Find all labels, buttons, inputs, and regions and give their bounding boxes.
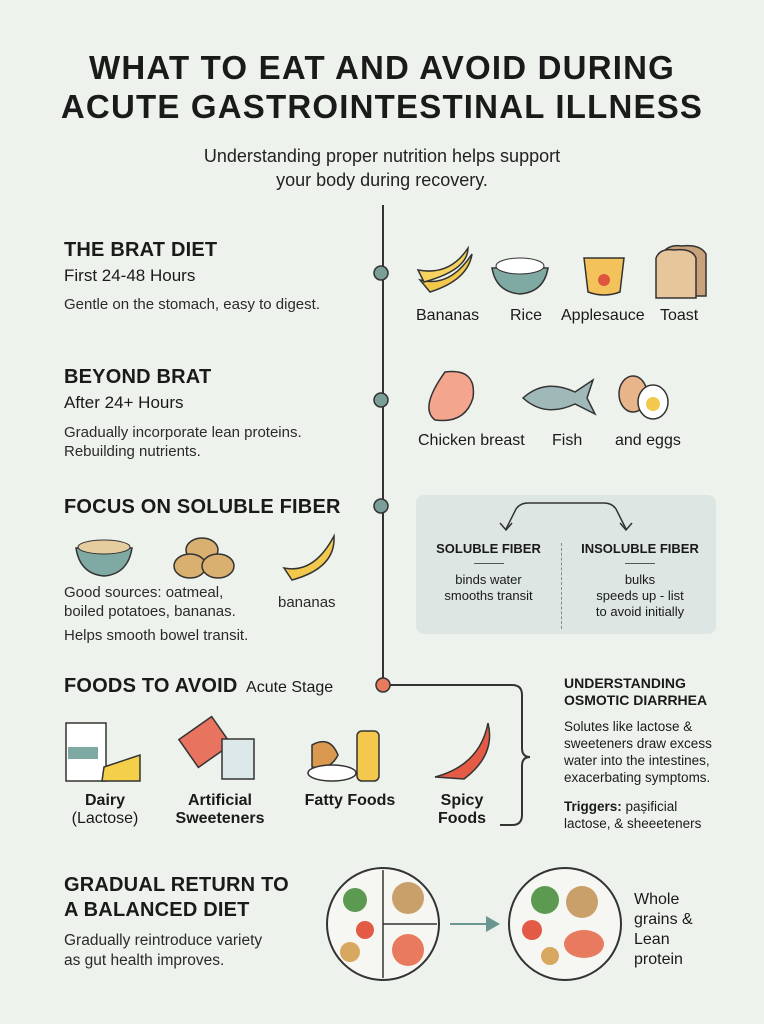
section: BRAT diet: First 24-48 Hours bbox=[64, 266, 195, 285]
callout: osmotic diarrhea: Solutes like lactose & bbox=[564, 719, 692, 734]
callout: osmotic diarrhea: exacerbating symptoms. bbox=[564, 770, 710, 785]
section: beyond BRAT bbox=[64, 366, 302, 460]
section: beyond BRAT: Rebuilding nutrients. bbox=[64, 443, 201, 460]
label: whole grains bbox=[634, 891, 693, 968]
section: balanced diet: A BALANCED DIET bbox=[64, 899, 250, 921]
protein icons: and eggs bbox=[615, 432, 681, 449]
fiber icons bbox=[75, 533, 335, 581]
callout: osmotic diarrhea: lactose, & sheeeteners bbox=[564, 816, 701, 831]
subtitle bbox=[204, 146, 560, 190]
panel: fiber comparison bbox=[416, 495, 716, 634]
avoid icons: Sweeteners bbox=[176, 810, 264, 827]
BRAT icons: Toast bbox=[660, 307, 698, 324]
section: soluble fiber: Helps smooth bowel transit. bbox=[64, 627, 248, 644]
panel: fiber comparison: speeds up - list bbox=[596, 588, 684, 603]
section: balanced diet bbox=[64, 874, 289, 969]
panel: fiber comparison: to avoid initially bbox=[596, 604, 684, 619]
section: foods to avoid: FOODS TO AVOID Acute Stage bbox=[64, 675, 333, 697]
panel: fiber comparison: smooths transit bbox=[444, 588, 533, 603]
avoid icons bbox=[65, 716, 490, 827]
panel: fiber comparison: SOLUBLE FIBER bbox=[436, 541, 541, 556]
section: beyond BRAT: After 24+ Hours bbox=[64, 393, 184, 412]
section: BRAT diet: Gentle on the stomach, easy to digest. bbox=[64, 296, 320, 313]
section: balanced diet: Gradually reintroduce variety bbox=[64, 932, 262, 949]
avoid icons: Foods bbox=[438, 810, 486, 827]
avoid icons: Artificial bbox=[188, 792, 252, 809]
section: soluble fiber: boiled potatoes, bananas. bbox=[64, 603, 236, 620]
label: whole grains: grains & bbox=[634, 911, 693, 928]
panel: fiber comparison: INSOLUBLE FIBER bbox=[581, 541, 699, 556]
avoid icons: Spicy bbox=[441, 792, 483, 809]
avoid icons: Fatty Foods bbox=[305, 792, 395, 809]
section: balanced diet: GRADUAL RETURN TO bbox=[64, 874, 289, 896]
BRAT icons: Rice bbox=[510, 307, 542, 324]
title bbox=[61, 49, 703, 125]
callout: osmotic diarrhea: water into the intestines, bbox=[564, 753, 710, 768]
panel: fiber comparison: bulks bbox=[625, 572, 655, 587]
protein icons: Chicken breast bbox=[418, 432, 525, 449]
avoid icons: Dairy bbox=[85, 792, 125, 809]
callout: osmotic diarrhea bbox=[564, 675, 712, 831]
callout: osmotic diarrhea: OSMOTIC DIARRHEA bbox=[564, 692, 707, 708]
label: whole grains: Lean bbox=[634, 931, 670, 948]
section: soluble fiber: FOCUS ON SOLUBLE FIBER bbox=[64, 496, 341, 518]
plates with arrow bbox=[326, 867, 622, 981]
protein icons bbox=[418, 370, 681, 449]
callout: osmotic diarrhea: UNDERSTANDING bbox=[564, 675, 686, 691]
section: soluble fiber: bananas bbox=[278, 594, 336, 611]
title: WHAT TO EAT AND AVOID DURING bbox=[89, 49, 675, 86]
section: beyond BRAT: BEYOND BRAT bbox=[64, 366, 211, 388]
label: whole grains: protein bbox=[634, 951, 683, 968]
subtitle: your body during recovery. bbox=[276, 170, 488, 190]
BRAT icons: Bananas bbox=[416, 307, 479, 324]
subtitle: Understanding proper nutrition helps support bbox=[204, 146, 560, 166]
avoid icons: (Lactose) bbox=[72, 810, 138, 827]
BRAT icons bbox=[416, 244, 707, 324]
title: ACUTE GASTROINTESTINAL ILLNESS bbox=[61, 88, 703, 125]
protein icons: Fish bbox=[552, 432, 582, 449]
section: balanced diet: as gut health improves. bbox=[64, 952, 224, 969]
section: BRAT diet bbox=[64, 239, 320, 313]
callout: osmotic diarrhea: sweeteners draw excess bbox=[564, 736, 712, 751]
section: BRAT diet: THE BRAT DIET bbox=[64, 239, 217, 261]
section: soluble fiber bbox=[64, 496, 341, 644]
section: soluble fiber: Good sources: oatmeal, bbox=[64, 584, 223, 601]
callout: osmotic diarrhea: Triggers: pașificial bbox=[564, 799, 677, 814]
section: beyond BRAT: Gradually incorporate lean proteins. bbox=[64, 424, 302, 441]
BRAT icons: Applesauce bbox=[561, 307, 645, 324]
panel: fiber comparison: binds water bbox=[455, 572, 522, 587]
label: whole grains: Whole bbox=[634, 891, 679, 908]
